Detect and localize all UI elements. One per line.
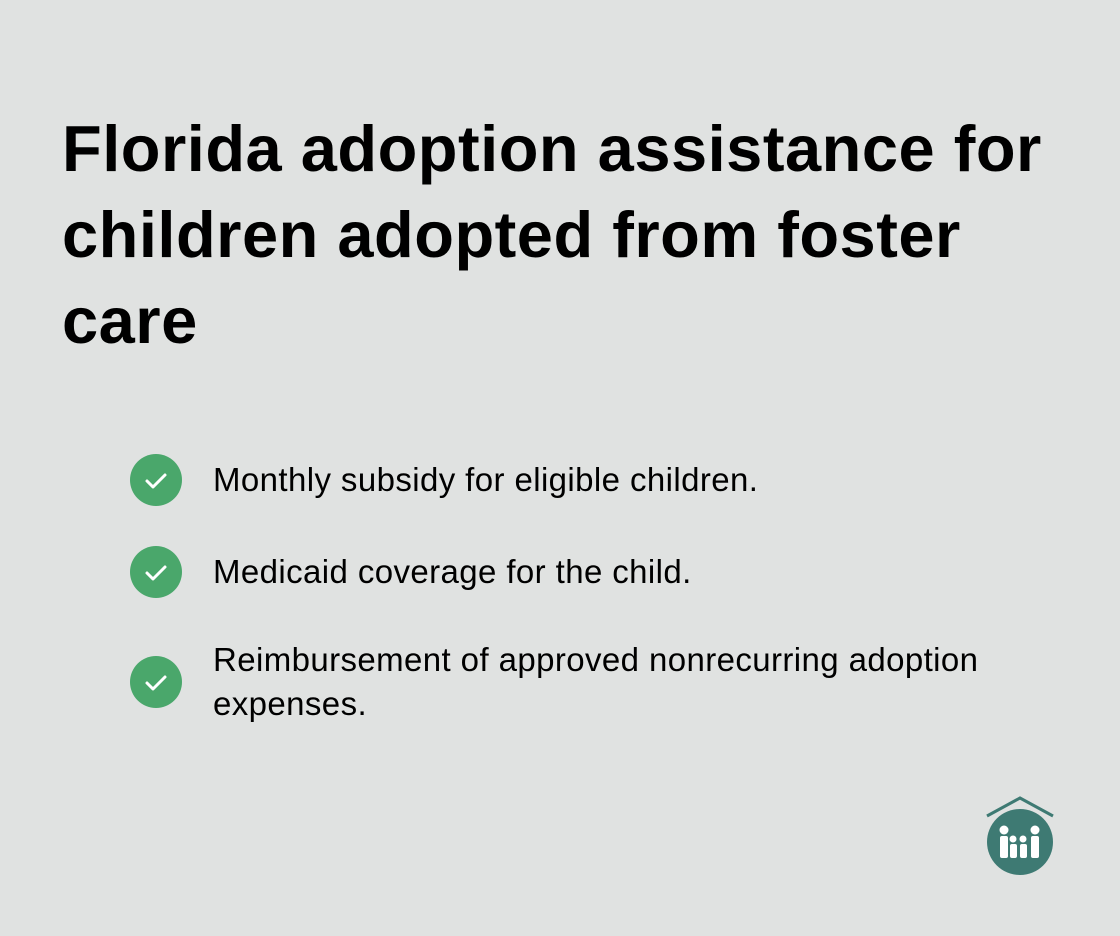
text: Medicaid coverage for the child. (213, 553, 692, 590)
text: Monthly subsidy for eligible children. (213, 461, 758, 498)
icon: check (130, 454, 182, 506)
icon: check (130, 546, 182, 598)
icon: check (130, 656, 182, 708)
item: reimbursement (130, 641, 978, 722)
item: medicaid (130, 546, 692, 598)
logo (986, 796, 1054, 875)
item: monthly subsidy (130, 454, 758, 506)
text: Reimbursement of approved nonrecurring adoption expenses. (213, 641, 978, 722)
title: Florida adoption assistance for children adopted from foster care (62, 112, 1042, 357)
